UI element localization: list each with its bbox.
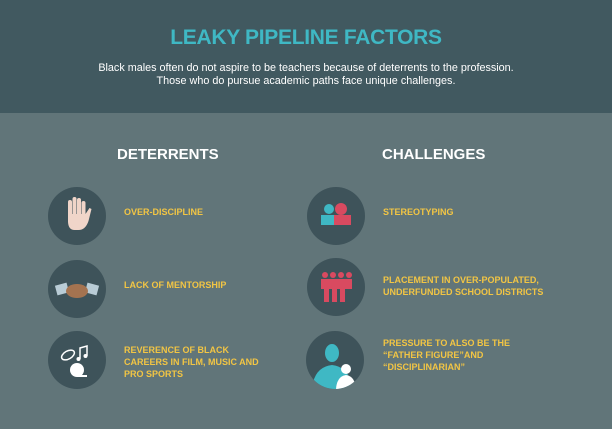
- text: pressure: “DISCIPLINARIAN”: [383, 362, 465, 372]
- heading: deterrents: DETERRENTS: [117, 146, 219, 163]
- icon: sports music film: [48, 331, 106, 389]
- heading: challenges: CHALLENGES: [382, 146, 485, 163]
- title: LEAKY PIPELINE FACTORS: [170, 26, 442, 49]
- text: pressure: [383, 338, 510, 372]
- text: reverence: CAREERS IN FILM, MUSIC AND: [124, 357, 259, 367]
- text: pressure: “FATHER FIGURE”AND: [383, 350, 483, 360]
- icon: hand: [48, 187, 106, 245]
- text: stereotyping: STEREOTYPING: [383, 207, 454, 217]
- text: placement: [383, 275, 543, 297]
- subtitle: [98, 62, 514, 87]
- subtitle: Those who do pursue academic paths face unique challenges.: [157, 75, 455, 87]
- icon: stereotyping: [307, 187, 365, 245]
- text: placement: PLACEMENT IN OVER-POPULATED,: [383, 275, 539, 285]
- text: reverence: REVERENCE OF BLACK: [124, 345, 229, 355]
- text: over-discipline: OVER-DISCIPLINE: [124, 207, 203, 217]
- text: pressure: PRESSURE TO ALSO BE THE: [383, 338, 510, 348]
- icon: handshake: [48, 260, 106, 318]
- text: reverence: [124, 345, 259, 379]
- text: lack of mentorship: LACK OF MENTORSHIP: [124, 280, 226, 290]
- text: reverence: PRO SPORTS: [124, 369, 183, 379]
- icon: crowd: [307, 258, 365, 316]
- text: placement: UNDERFUNDED SCHOOL DISTRICTS: [383, 287, 543, 297]
- header band: [0, 0, 612, 113]
- subtitle: Black males often do not aspire to be teachers because of deterrents to the profession.: [98, 62, 514, 74]
- icon: father figure: [306, 331, 364, 389]
